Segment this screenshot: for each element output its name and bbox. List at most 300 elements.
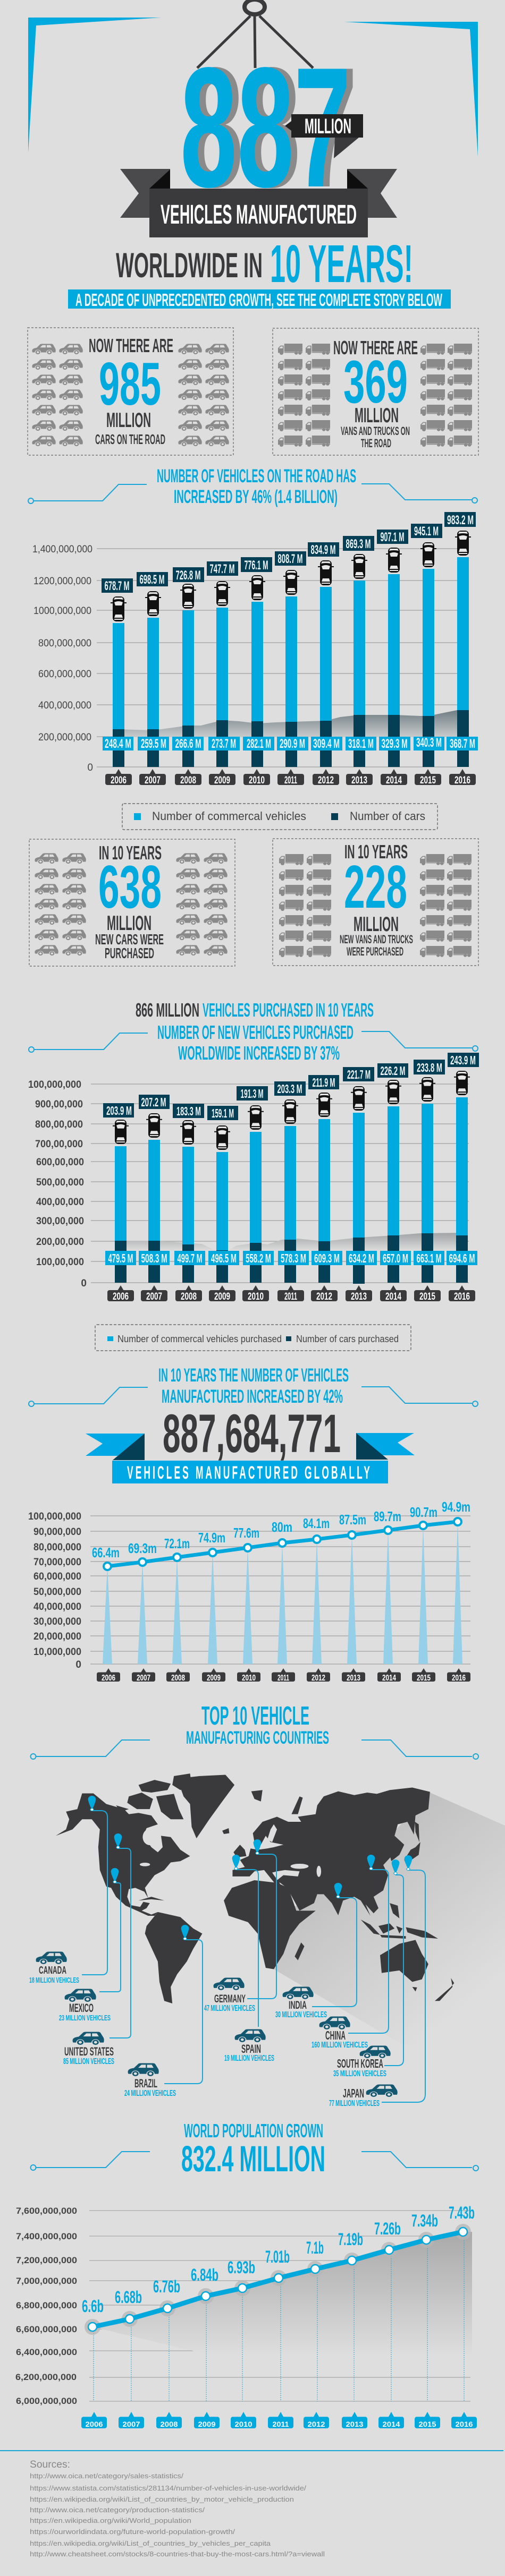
country: united states: [63, 2032, 114, 2066]
icon: top-view cars: [113, 1071, 470, 1150]
legend: vehicles on the road: Number of commercal vehicles: [152, 809, 306, 823]
value labels: 66.4m: [92, 1545, 120, 1560]
year labels: 2014: [382, 1674, 396, 1683]
text: new cars were purchased: [95, 931, 164, 961]
value labels: 7.34b: [411, 2211, 438, 2230]
sources heading: Sources:: [30, 2459, 70, 2470]
887 headline number: 887: [180, 32, 351, 223]
y axis labels: 0: [75, 1659, 81, 1670]
chart: vehicles manufactured per year: [28, 1499, 470, 1683]
year labels: 2010: [242, 1674, 256, 1683]
bars: cars: [113, 710, 469, 767]
heading: world population: WORLD POPULATION GROWN: [184, 2120, 323, 2142]
arctic islands: [116, 1773, 192, 1900]
sources links: https://en.wikipedia.org/wiki/World_population: [30, 2517, 191, 2524]
heading: vehicles manufactured increased: [158, 1365, 349, 1407]
year labels: 2011: [284, 775, 297, 786]
icon: car columns: [32, 344, 229, 446]
country: china: 160 MILLION VEHICLES: [312, 2041, 368, 2050]
chart: vehicles purchased: [28, 1053, 479, 1302]
connector lines: [29, 1031, 478, 1052]
value text: commercial vehicles: 207.2 M: [141, 1095, 166, 1109]
text: million: MILLION: [107, 912, 152, 935]
value labels: commercial vehicles: [102, 512, 476, 593]
value text: commercial vehicles: 243.9 M: [450, 1053, 476, 1067]
connector lines: [31, 2152, 478, 2171]
text: vans and trucks on the road: VANS AND TRUCKS ON: [341, 424, 410, 438]
y axis labels: 1,400,000,000: [32, 544, 92, 555]
sources links: http://www.oica.net/category/sales-statistics/: [30, 2472, 183, 2480]
year labels: 2012: [318, 775, 334, 786]
year labels: 2016: [455, 2420, 473, 2428]
country: canada: [29, 1951, 79, 1985]
value text: commercial vehicles: 869.3 M: [346, 537, 371, 551]
heading: 866 million purchased: WORLDWIDE INCREASED BY 37%: [178, 1042, 340, 1064]
year labels: 2013: [347, 1674, 360, 1683]
area under line: [92, 2232, 472, 2356]
year labels: 2016: [454, 775, 470, 786]
y axis labels: 6,400,000,000: [16, 2347, 77, 2357]
value text: commercial vehicles: 907.1 M: [381, 530, 404, 544]
value text: commercial vehicles: 203.9 M: [106, 1104, 132, 1118]
icon: top-view cars: [111, 531, 471, 621]
sources links: [30, 2472, 325, 2558]
spikes under line: [103, 1522, 462, 1664]
point halos: [85, 2224, 471, 2335]
line series: [92, 2232, 463, 2327]
country: united states: UNITED STATES: [64, 2045, 114, 2058]
year labels: 2013: [351, 775, 367, 786]
legend: vehicles purchased: [95, 1325, 411, 1351]
y axis labels: 6,800,000,000: [16, 2300, 77, 2310]
title: worldwide in: WORLDWIDE IN: [116, 245, 263, 285]
stat: 985: 985: [99, 351, 161, 418]
value labels: 84.1m: [303, 1515, 330, 1531]
year labels: 2012: [307, 2420, 325, 2428]
text: new cars were purchased: PURCHASED: [105, 945, 154, 961]
year labels: 2011: [284, 1291, 297, 1302]
line series: [107, 1522, 458, 1566]
connector lines: [28, 484, 477, 504]
y axis labels: 6,600,000,000: [16, 2324, 77, 2334]
greenland: [177, 1775, 234, 1838]
sources links: https://en.wikipedia.org/wiki/List_of_countries_by_motor_vehicle_production: [30, 2495, 294, 2503]
text: vans and trucks on the road: THE ROAD: [361, 437, 391, 450]
year labels: 2011: [277, 1674, 289, 1683]
value text: commercial vehicles: 221.7 M: [347, 1068, 371, 1081]
panel: cars on the road: [28, 328, 233, 455]
value text: commercial vehicles: 983.2 M: [447, 513, 474, 527]
heading: top 10 countries: MANUFACTURING COUNTRIES: [186, 1728, 329, 1748]
text: now there are: NOW THERE ARE: [333, 337, 418, 359]
year labels: 2006: [85, 2420, 103, 2428]
y axis labels: 7,000,000,000: [16, 2276, 77, 2286]
year labels: [85, 2420, 473, 2428]
africa: [224, 1880, 316, 1969]
data points: [88, 2228, 467, 2331]
icon: car columns: [35, 853, 228, 956]
value text: commercial vehicles: [104, 513, 474, 593]
year labels: [111, 775, 470, 786]
value text: commercial vehicles: 747.7 M: [209, 562, 235, 576]
sources divider and list: [0, 2451, 503, 2558]
legend: vehicles purchased: Number of cars purchased: [296, 1334, 399, 1344]
country: canada: 18 MILLION VEHICLES: [29, 1976, 79, 1985]
y axis labels: 6,200,000,000: [15, 2372, 77, 2382]
text: million: MILLION: [354, 913, 399, 936]
year labels: 2015: [420, 775, 436, 786]
value labels: 80m: [272, 1519, 292, 1535]
value text: commercial vehicles: 203.3 M: [277, 1082, 302, 1096]
year labels: [113, 1291, 470, 1302]
country: india: INDIA: [289, 1999, 307, 2011]
sources links: https://www.statista.com/statistics/281134/number-of-vehicles-in-use-worldwide/: [30, 2484, 306, 2492]
y axis labels: 900,00,000: [35, 1099, 83, 1110]
stat: 228: 228: [344, 854, 407, 921]
text: million: MILLION: [355, 404, 399, 427]
year labels: 2012: [312, 1674, 325, 1683]
value labels: 87.5m: [339, 1512, 366, 1528]
y axis labels: 10,000,000: [33, 1647, 81, 1658]
map pins: [88, 1796, 412, 1940]
value text: cars: 663.1 M: [417, 1251, 441, 1265]
value labels: 89.7m: [374, 1508, 401, 1524]
heading: vehicles on the road: INCREASED BY 46% (1.4 BILLION): [174, 487, 338, 507]
year labels: 2015: [419, 2420, 436, 2428]
year labels: 2007: [145, 775, 161, 786]
value text: cars: 282.1 M: [247, 737, 271, 751]
y axis labels: 100,000,000: [28, 1511, 81, 1522]
heading: 866 million purchased: 866 MILLION: [136, 999, 199, 1021]
connector lines: [29, 1387, 478, 1406]
south america: [145, 1912, 203, 2003]
icon: truck columns: [278, 344, 472, 447]
value labels: 7.01b: [265, 2247, 290, 2266]
country: germany: 47 MILLION VEHICLES: [204, 2004, 255, 2013]
y axis labels: [28, 1511, 81, 1670]
y axis labels: 40,000,000: [33, 1601, 81, 1613]
blue corner bracket right: [344, 22, 478, 157]
value labels: 90.7m: [410, 1504, 437, 1520]
year labels: [102, 1674, 466, 1683]
year labels: 2007: [146, 1291, 162, 1302]
value text: cars: [105, 736, 475, 751]
value labels: 7.19b: [338, 2230, 363, 2249]
country: china: CHINA: [325, 2028, 346, 2042]
y axis labels: 0: [87, 762, 93, 773]
year labels: 2015: [419, 1291, 435, 1302]
sources links: http://www.cheatsheet.com/stocks/8-countries-that-buy-the-most-cars.html/?a=viewall: [30, 2550, 325, 2558]
north america: [56, 1793, 190, 1916]
blue corner bracket left: [28, 18, 161, 152]
sources links: https://en.wikipedia.org/wiki/List_of_countries_by_vehicles_per_capita: [30, 2539, 271, 2547]
year labels: 2011: [272, 2420, 289, 2428]
value text: cars: 578.3 M: [281, 1251, 306, 1265]
y axis labels: 7,200,000,000: [16, 2255, 77, 2265]
value text: commercial vehicles: 808.7 M: [277, 552, 303, 566]
y axis labels: 30,000,000: [33, 1616, 81, 1627]
ribbon: vehicles manufactured globally: [86, 1433, 415, 1483]
value text: commercial vehicles: 834.9 M: [310, 543, 336, 557]
value labels: 7.1b: [306, 2238, 324, 2257]
y axis labels: 6,000,000,000: [16, 2396, 77, 2406]
year labels: 2010: [249, 775, 265, 786]
value labels: 6.93b: [228, 2258, 255, 2277]
stat: 369: 369: [343, 348, 408, 416]
value text: cars: 318.1 M: [348, 737, 374, 751]
year labels: 2007: [122, 2420, 140, 2428]
country: germany: GERMANY: [214, 1993, 246, 2005]
year labels: 2006: [102, 1674, 115, 1683]
value text: commercial vehicles: 678.7 M: [104, 579, 130, 593]
islands: asia pacific and europe: [222, 1790, 454, 2001]
text: new cars were purchased: NEW CARS WERE: [95, 931, 164, 948]
value text: cars: 259.5 M: [141, 737, 166, 751]
country: brazil: [124, 2063, 176, 2098]
data points: [104, 1518, 461, 1570]
text: in 10 years: IN 10 YEARS: [344, 841, 408, 863]
country: china: [312, 2016, 368, 2050]
sources links: http://www.oica.net/category/production-statistics/: [30, 2506, 205, 2514]
leader lines from map pins to countries: [82, 1811, 425, 2102]
y axis labels: 60,000,000: [33, 1571, 81, 1582]
year labels: 2009: [198, 2420, 216, 2428]
value text: cars: 309.4 M: [313, 737, 340, 751]
area: trend behind bars: [121, 1233, 462, 1253]
value labels: cars: [105, 1251, 477, 1265]
country: spain: 19 MILLION VEHICLES: [224, 2054, 274, 2063]
value labels: 6.68b: [115, 2288, 142, 2307]
area: trend behind bars: [119, 710, 463, 737]
legend: vehicles on the road: [122, 804, 437, 830]
year labels: 2009: [207, 1674, 221, 1683]
text: new vans and trucks were purchased: WERE PURCHASED: [347, 945, 403, 958]
legend: vehicles purchased: Number of commercal vehicles purchased: [117, 1334, 282, 1344]
value text: cars: 479.5 M: [108, 1251, 133, 1265]
stat: 638: 638: [98, 854, 162, 921]
country: spain: [224, 2029, 274, 2063]
bars: commercial vehicles: [115, 1097, 468, 1250]
ribbon: vehicles manufactured: [120, 169, 397, 237]
year labels: 2010: [235, 2420, 252, 2428]
value text: cars: 508.3 M: [141, 1251, 167, 1265]
y axis labels: 800,000,000: [38, 638, 91, 649]
y axis labels: 0: [81, 1278, 87, 1289]
stat: 887,684,771: 887,684,771: [163, 1403, 341, 1464]
year labels: 2013: [351, 1291, 367, 1302]
country: south korea: [333, 2045, 391, 2078]
value labels: 7.26b: [374, 2219, 401, 2238]
year labels: 2014: [386, 775, 402, 786]
value text: cars: 248.4 M: [105, 737, 131, 751]
value text: cars: [108, 1251, 475, 1265]
value labels: 69.3m: [128, 1540, 157, 1556]
y axis labels: 70,000,000: [33, 1557, 81, 1568]
y axis labels: 600,00,000: [36, 1157, 84, 1168]
million badge: [285, 114, 363, 158]
value text: commercial vehicles: 226.2 M: [381, 1064, 405, 1078]
y axis labels: 7,400,000,000: [16, 2231, 77, 2241]
value text: cars: 694.6 M: [449, 1251, 475, 1265]
value labels: 6.6b: [82, 2297, 104, 2316]
text: cars on the road: CARS ON THE ROAD: [95, 431, 165, 447]
country: spain: SPAIN: [241, 2042, 261, 2055]
value text: commercial vehicles: 159.1 M: [212, 1106, 234, 1120]
y axis labels: [15, 2206, 77, 2406]
year tags: [107, 1285, 475, 1301]
country: japan: [329, 2084, 398, 2108]
value text: cars: 558.2 M: [246, 1251, 271, 1265]
country: south korea: 35 MILLION VEHICLES: [333, 2069, 386, 2078]
heading: top 10 countries: [186, 1702, 329, 1748]
year labels: 2010: [248, 1291, 264, 1302]
country: germany: [204, 1977, 255, 2013]
y axis labels: 1000,000,000: [33, 605, 91, 617]
year labels: 2014: [383, 2420, 400, 2428]
country: canada: CANADA: [39, 1965, 66, 1976]
year tags: [105, 769, 476, 785]
y axis labels: 100,00,000: [36, 1257, 84, 1268]
value labels: 6.84b: [191, 2265, 218, 2284]
heading: world population: 832.4 MILLION: [181, 2138, 325, 2179]
value text: cars: 499.7 M: [178, 1251, 202, 1265]
y axis labels: 400,00,000: [36, 1197, 84, 1208]
country: brazil: 24 MILLION VEHICLES: [124, 2089, 176, 2098]
icon: truck columns: [279, 854, 472, 957]
legend: vehicles on the road: Number of cars: [350, 809, 425, 823]
y axis labels: 50,000,000: [33, 1586, 81, 1598]
value text: commercial vehicles: 183.3 M: [176, 1104, 201, 1118]
value labels: [92, 1499, 470, 1560]
year tags: [81, 2412, 477, 2428]
value text: cars: 273.7 M: [212, 737, 236, 751]
heading: top 10 countries: TOP 10 VEHICLE: [201, 1702, 309, 1730]
country: south korea: SOUTH KOREA: [337, 2057, 383, 2070]
country: brazil: BRAZIL: [134, 2077, 157, 2090]
value text: commercial vehicles: 191.3 M: [240, 1087, 264, 1101]
country: japan: JAPAN: [343, 2086, 364, 2100]
country: india: [275, 1986, 327, 2019]
value text: cars: 266.6 M: [175, 737, 201, 751]
y axis labels: 500,00,000: [36, 1177, 84, 1188]
y axis labels: [32, 544, 93, 773]
y axis labels: 1200,000,000: [33, 576, 91, 587]
year labels: 2006: [113, 1291, 129, 1302]
y axis labels: 700,00,000: [35, 1139, 83, 1150]
country: united states: 85 MILLION VEHICLES: [63, 2057, 114, 2066]
y axis labels: 20,000,000: [33, 1631, 81, 1642]
dotted drop lines: [94, 2232, 464, 2401]
chart: vehicles on the road: [32, 512, 478, 786]
sources links: https://ourworldindata.org/future-world-population-growth/: [30, 2528, 235, 2536]
value labels: 6.76b: [153, 2277, 180, 2296]
year labels: 2009: [214, 775, 230, 786]
text: now there are: NOW THERE ARE: [89, 335, 173, 356]
year labels: 2007: [137, 1674, 150, 1683]
year labels: 2016: [454, 1291, 470, 1302]
y axis labels: 400,000,000: [38, 700, 91, 711]
value text: cars: 634.2 M: [349, 1251, 374, 1265]
panel: vans and trucks on the road: [273, 328, 478, 455]
value labels: 72.1m: [164, 1536, 190, 1551]
value text: commercial vehicles: 945.1 M: [414, 524, 439, 539]
value text: cars: 368.7 M: [450, 737, 475, 751]
country: mexico: MEXICO: [69, 2001, 94, 2015]
world map: [56, 1773, 505, 2045]
value text: commercial vehicles: 211.9 M: [313, 1076, 335, 1089]
million badge: MILLION: [305, 115, 351, 138]
y axis labels: 90,000,000: [33, 1526, 81, 1538]
year labels: 2014: [385, 1291, 401, 1302]
value text: cars: 290.9 M: [280, 737, 305, 751]
australia: [380, 1940, 428, 1982]
text: million: MILLION: [106, 409, 151, 432]
chart: world population: [15, 2203, 477, 2428]
y axis labels: 200,00,000: [36, 1236, 84, 1248]
heading: world population: [181, 2120, 325, 2179]
year labels: 2013: [346, 2420, 364, 2428]
country: japan: 77 MILLION VEHICLES: [329, 2099, 380, 2108]
panel: new vans and trucks purchased: [273, 839, 478, 966]
y axis labels: 600,000,000: [38, 669, 91, 680]
heading: vehicles on the road: [157, 466, 356, 507]
year labels: 2008: [181, 1291, 197, 1302]
country: mexico: 23 MILLION VEHICLES: [59, 2014, 111, 2023]
value text: commercial vehicles: 776.1 M: [245, 558, 268, 573]
heading: vehicles manufactured increased: MANUFACTURED INCREASED BY 42%: [162, 1386, 343, 1407]
y axis labels: 100,000,000: [28, 1079, 81, 1090]
value labels: 77.6m: [233, 1525, 259, 1541]
year labels: 2008: [180, 775, 196, 786]
value text: cars: 496.5 M: [211, 1251, 237, 1265]
value labels: cars: [103, 737, 478, 750]
y axis labels: 200,000,000: [38, 732, 91, 743]
year labels: 2008: [171, 1674, 185, 1683]
887 shadow: 887: [187, 32, 357, 223]
text: new vans and trucks were purchased: [340, 933, 413, 958]
value text: commercial vehicles: 233.8 M: [417, 1061, 442, 1074]
value labels: 7.43b: [449, 2203, 475, 2222]
panel: new cars purchased: [29, 839, 235, 966]
value text: cars: 329.3 M: [382, 737, 407, 751]
year labels: 2015: [417, 1674, 431, 1683]
value labels: 74.9m: [198, 1530, 225, 1546]
icon: crane hook and cables: [197, 0, 313, 68]
value text: commercial vehicles: [106, 1053, 476, 1120]
value labels: 94.9m: [442, 1499, 470, 1515]
y axis labels: 300,00,000: [36, 1216, 84, 1227]
y axis labels: 800,00,000: [35, 1119, 83, 1130]
text: new vans and trucks were purchased: NEW VANS AND TRUCKS: [340, 933, 413, 946]
y axis labels: 7,600,000,000: [16, 2206, 77, 2216]
connector lines: [31, 1740, 478, 1759]
heading: 866 million purchased: [136, 999, 374, 1064]
value text: commercial vehicles: 726.8 M: [175, 568, 201, 583]
year labels: 2009: [214, 1291, 230, 1302]
inland seas: [140, 1824, 321, 1877]
country: india: 30 MILLION VEHICLES: [275, 2010, 327, 2019]
bars: cars: [115, 1233, 468, 1284]
value text: cars: 657.0 M: [383, 1251, 408, 1265]
eurasia: [232, 1787, 430, 1916]
bars: commercial vehicles: [113, 557, 469, 729]
year labels: 2008: [161, 2420, 178, 2428]
header panel: [28, 0, 478, 310]
value labels: [82, 2203, 475, 2316]
year labels: 2012: [316, 1291, 332, 1302]
value text: cars: 340.3 M: [416, 736, 442, 750]
country: mexico: [59, 1989, 111, 2023]
